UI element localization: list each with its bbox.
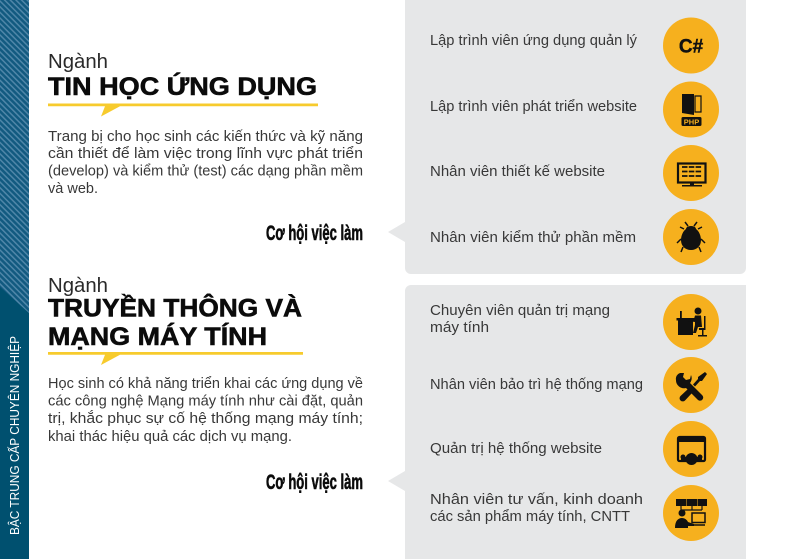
section 2 description: khai thác hiệu quả các dịch vụ mạng. <box>48 429 292 445</box>
section 1 callout: Cơ hội việc làm <box>266 222 363 245</box>
sidebar <box>0 0 29 559</box>
job 7: Quản trị hệ thống website <box>430 441 602 457</box>
section 2 description: các công nghệ Mạng máy tính như cài đặt, quản <box>48 394 363 410</box>
icon: office worker <box>663 294 719 350</box>
icon: monitor <box>663 145 719 201</box>
section 2 description: trị, khắc phục sự cố hệ thống mạng máy tính; <box>48 410 363 427</box>
icon: ASP PHP: PHP <box>684 118 699 126</box>
job 8: các sản phẩm máy tính, CNTT <box>430 509 630 525</box>
icon: C# <box>663 18 719 74</box>
job 8: Nhân viên tư vấn, kinh doanh <box>430 492 643 508</box>
panel: job list 1 <box>388 0 746 274</box>
section 1 description: cần thiết để làm việc trong lĩnh vực phát triển <box>48 146 363 162</box>
job 8 <box>430 492 643 525</box>
icon: bug <box>663 209 719 265</box>
section 2 description: Học sinh có khả năng triển khai các ứng dụng về <box>48 376 363 392</box>
job 4: Nhân viên kiểm thử phần mềm <box>430 230 636 246</box>
icon: website settings <box>663 421 719 477</box>
section 1 description: (develop) và kiểm thử (test) các dạng phần mềm <box>48 164 363 180</box>
section 2 callout: Cơ hội việc làm <box>266 471 363 494</box>
icon: C#: C# <box>679 36 704 58</box>
job 3: Nhân viên thiết kế website <box>430 164 605 180</box>
icon: consultant <box>663 485 719 541</box>
icon: tools <box>663 357 719 413</box>
job 5: máy tính <box>430 320 489 336</box>
section 2 speech underline <box>48 352 303 365</box>
job 5 <box>430 303 610 336</box>
section 2 heading: MẠNG MÁY TÍNH <box>48 322 267 351</box>
section 2 description <box>48 376 363 445</box>
job 2: Lập trình viên phát triển website <box>430 99 637 115</box>
sidebar label: BẬC TRUNG CẤP CHUYÊN NGHIỆP <box>7 336 22 535</box>
section 1 speech underline <box>48 104 318 116</box>
section 2 heading <box>48 292 302 351</box>
job 1: Lập trình viên ứng dụng quản lý <box>430 33 638 49</box>
section 1 label: Ngành <box>48 51 108 73</box>
section 1 description: và web. <box>48 181 98 197</box>
section 1 description <box>48 129 363 197</box>
job 6: Nhân viên bảo trì hệ thống mạng <box>430 377 643 393</box>
job 5: Chuyên viên quản trị mạng <box>430 303 610 319</box>
section 1 heading: TIN HỌC ỨNG DỤNG <box>48 71 317 101</box>
section 1 description: Trang bị cho học sinh các kiến thức và kỹ năng <box>48 129 363 145</box>
section 2 label: Ngành <box>48 275 108 297</box>
icon: ASP PHP <box>663 82 719 138</box>
section 2 heading: TRUYỀN THÔNG VÀ <box>48 292 302 322</box>
panel: job list 2 <box>388 285 746 559</box>
